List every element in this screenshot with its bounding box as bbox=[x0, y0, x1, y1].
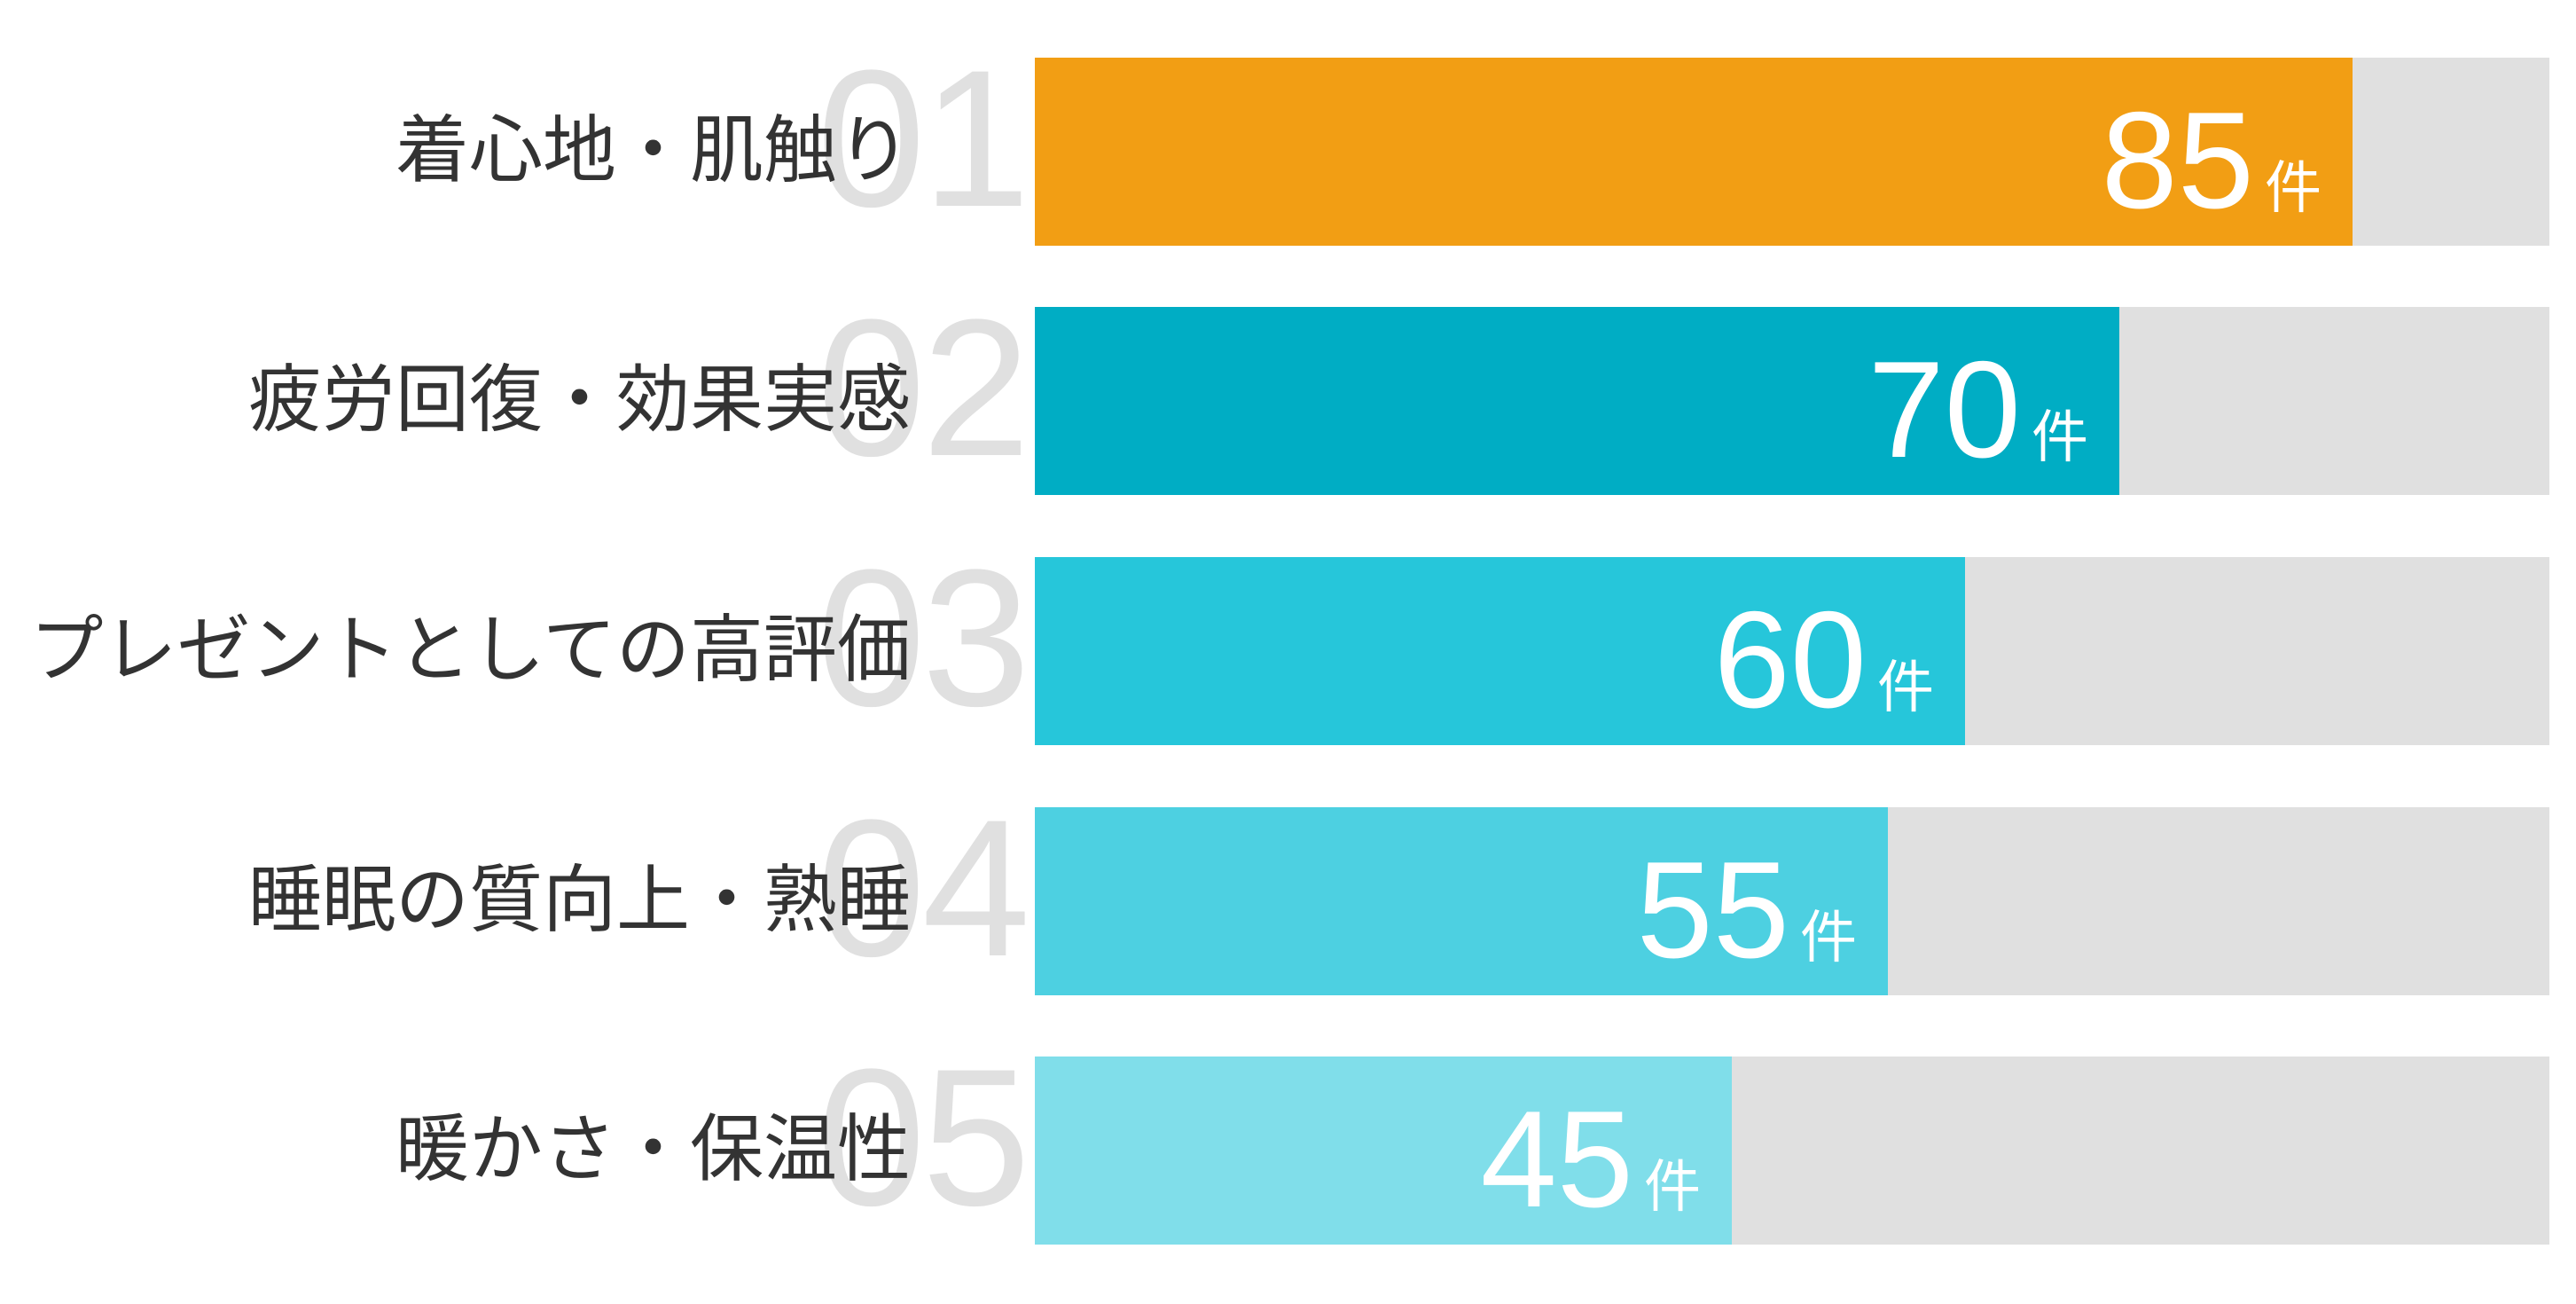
bar 3 bbox=[1035, 557, 2549, 745]
rank number 05: 05 bbox=[817, 1028, 1027, 1246]
label 1: 着心地・肌触り bbox=[395, 109, 911, 192]
bar 4 bbox=[1035, 807, 2549, 995]
rank number 03: 03 bbox=[817, 529, 1027, 747]
row 5 bbox=[395, 1028, 2549, 1246]
label 5: 暖かさ・保温性 bbox=[395, 1108, 911, 1190]
label 2: 疲労回復・効果実感 bbox=[248, 358, 911, 441]
rank number 02: 02 bbox=[817, 279, 1027, 497]
label 3: プレゼントとしての高評価 bbox=[29, 609, 911, 691]
row 1 bbox=[395, 29, 2549, 247]
bar 5 bbox=[1035, 1057, 2549, 1245]
row 4 bbox=[248, 779, 2549, 997]
bar 2 bbox=[1035, 307, 2549, 495]
rank number 04: 04 bbox=[817, 779, 1027, 997]
row 3 bbox=[29, 529, 2549, 747]
bar 2: 70件 bbox=[1868, 333, 2088, 486]
bar 3: 60件 bbox=[1714, 583, 1934, 736]
bar 1 bbox=[1035, 58, 2549, 246]
rank number 01: 01 bbox=[817, 29, 1027, 247]
bar 1: 85件 bbox=[2102, 83, 2322, 237]
row 2 bbox=[248, 279, 2549, 497]
bar 4: 55件 bbox=[1637, 833, 1857, 986]
label 4: 睡眠の質向上・熟睡 bbox=[248, 859, 911, 941]
bar 5: 45件 bbox=[1481, 1082, 1701, 1236]
